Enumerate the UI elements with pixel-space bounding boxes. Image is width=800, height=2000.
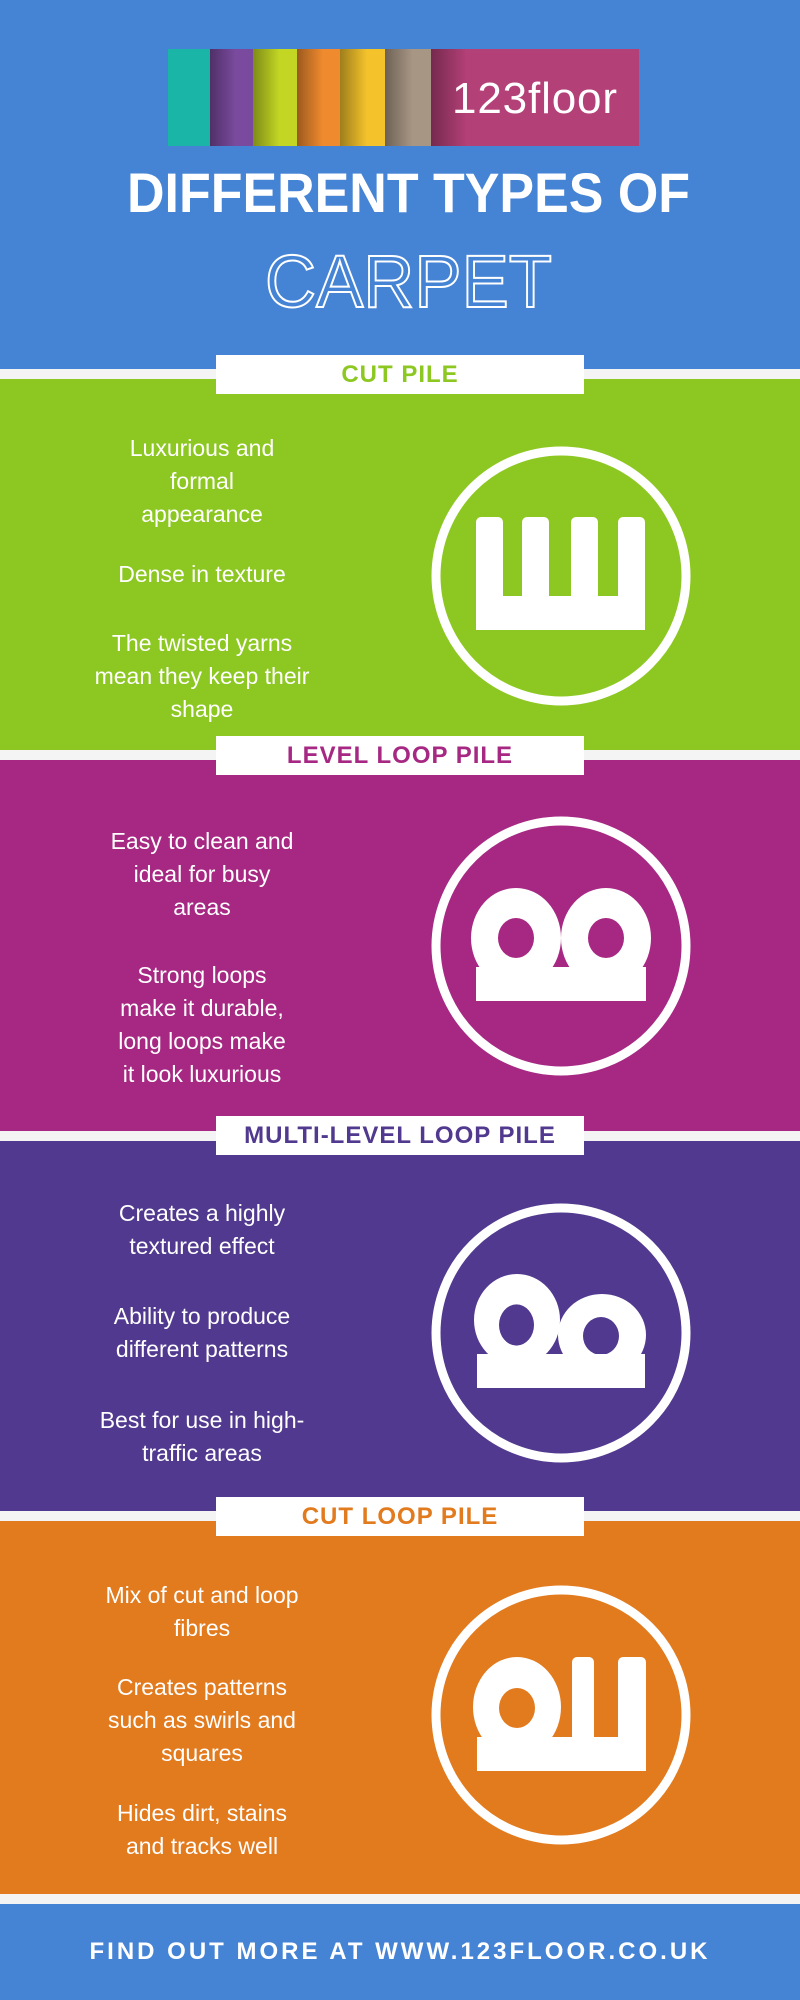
text: cut loop: Hides dirt, stains: [117, 1800, 287, 1826]
title: [127, 161, 690, 320]
text: level loop: [111, 828, 293, 1087]
heading: cut pile: [216, 355, 584, 394]
panel: level loop pile: [0, 760, 800, 1131]
icon: level loop: [432, 816, 690, 1076]
text: multi-level: Ability to produce: [114, 1303, 290, 1329]
header band: [0, 0, 800, 369]
logo: 123floor: [452, 74, 617, 123]
text: cut loop: such as swirls and: [108, 1707, 296, 1733]
text: cut pile: mean they keep their: [95, 663, 309, 689]
text: multi-level: Best for use in high-: [100, 1407, 304, 1433]
panel: cut pile: [0, 379, 800, 750]
title: DIFFERENT TYPES OF: [127, 161, 690, 224]
text: level loop: it look luxurious: [123, 1061, 281, 1087]
icon: cut pile: [432, 446, 690, 706]
heading: cut loop pile: [216, 1497, 584, 1536]
heading: level loop pile: [216, 736, 584, 775]
text: multi-level: textured effect: [129, 1233, 275, 1259]
panel: cut loop pile: [0, 1521, 800, 1894]
text: multi-level: [100, 1200, 304, 1466]
text: multi-level: Creates a highly: [119, 1200, 285, 1226]
text: level loop: make it durable,: [120, 995, 284, 1021]
text: level loop: areas: [173, 894, 231, 920]
icon: cut loop: [432, 1586, 690, 1844]
text: cut loop: squares: [161, 1740, 243, 1766]
text: cut pile: The twisted yarns: [112, 630, 292, 656]
text: cut pile: shape: [171, 696, 233, 722]
footer: FIND OUT MORE AT WWW.123FLOOR.CO.UK: [90, 1938, 710, 1965]
heading: cut loop pile: CUT LOOP PILE: [302, 1503, 498, 1530]
panel: multi-level loop pile: [0, 1141, 800, 1511]
heading: multi-level loop pile: MULTI-LEVEL LOOP PILE: [244, 1122, 556, 1149]
heading: multi-level loop pile: [216, 1116, 584, 1155]
text: cut loop: Mix of cut and loop: [105, 1582, 299, 1608]
footer: [0, 1904, 800, 2000]
text: cut pile: formal: [170, 468, 234, 494]
text: level loop: Easy to clean and: [111, 828, 293, 854]
text: cut pile: appearance: [141, 501, 263, 527]
text: cut loop: fibres: [174, 1615, 230, 1641]
icon: multi-level loop: [432, 1204, 690, 1462]
text: cut pile: [95, 435, 310, 722]
text: multi-level: different patterns: [116, 1336, 288, 1362]
logo: [168, 49, 639, 146]
text: cut pile: Dense in texture: [118, 561, 286, 587]
text: cut loop: Creates patterns: [117, 1674, 287, 1700]
text: level loop: Strong loops: [137, 962, 267, 988]
heading: level loop pile: LEVEL LOOP PILE: [287, 742, 513, 769]
text: cut loop: [105, 1582, 299, 1859]
text: level loop: ideal for busy: [134, 861, 270, 887]
text: cut loop: and tracks well: [126, 1833, 278, 1859]
text: level loop: long loops make: [118, 1028, 286, 1054]
text: multi-level: traffic areas: [142, 1440, 262, 1466]
text: cut pile: Luxurious and: [130, 435, 274, 461]
heading: cut pile: CUT PILE: [341, 361, 459, 388]
